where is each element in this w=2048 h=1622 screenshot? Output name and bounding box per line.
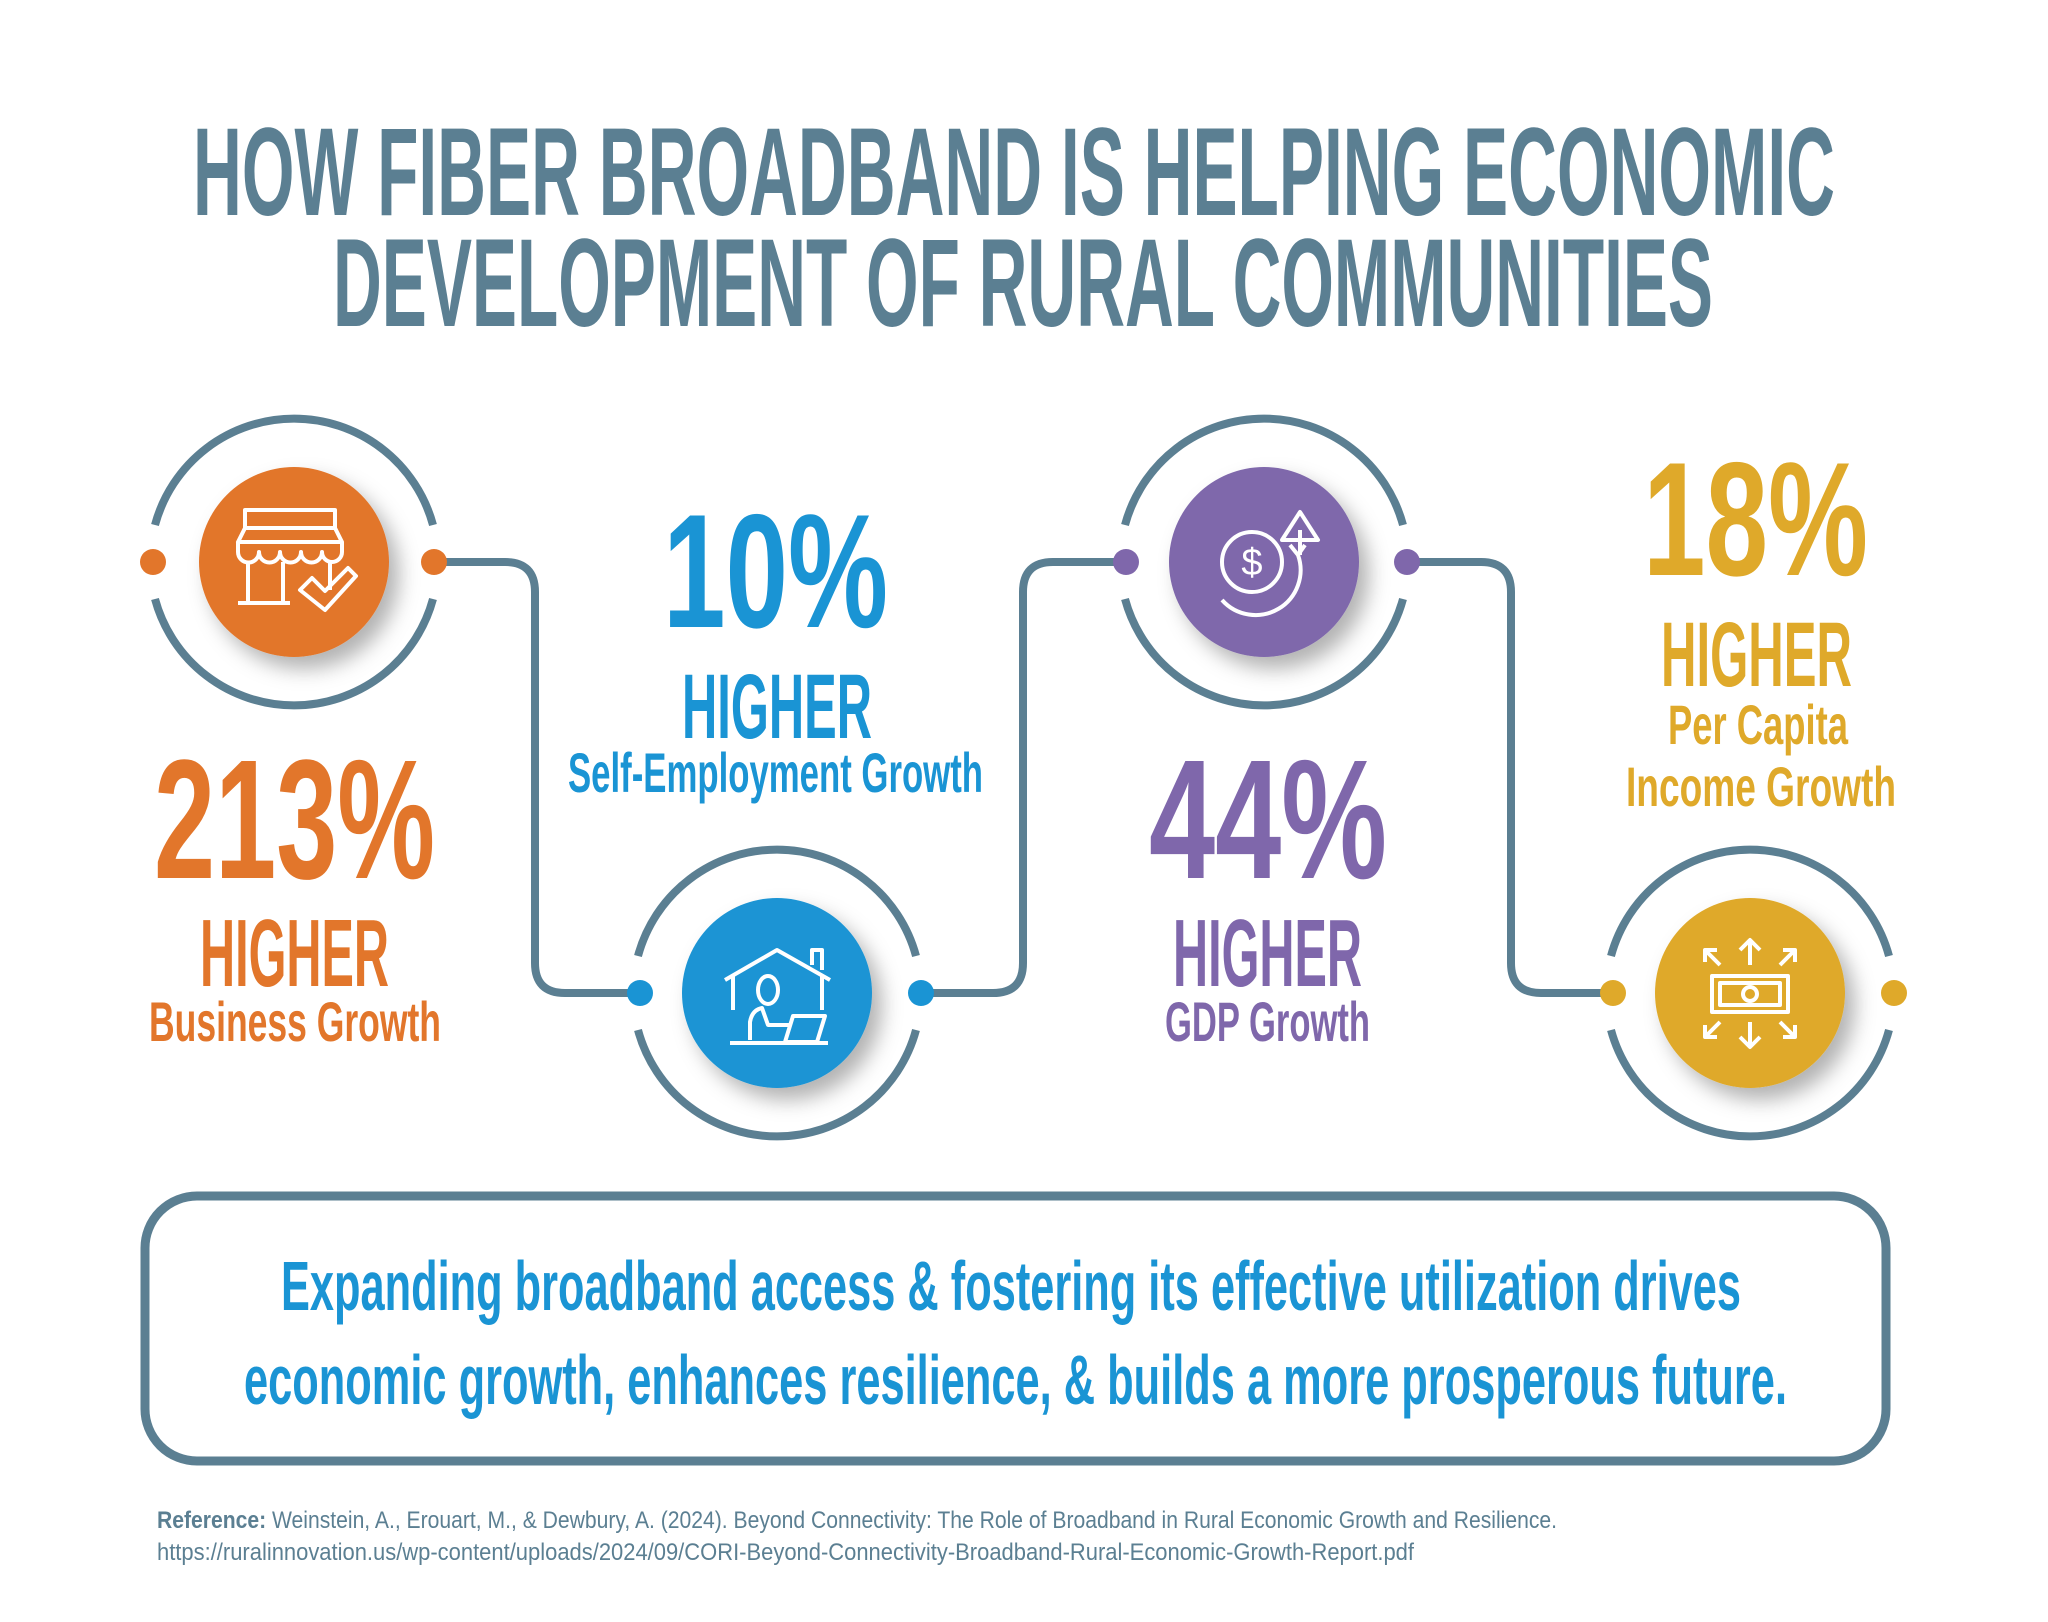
stat: per capita income growth: Income Growth (1626, 755, 1896, 818)
stat: GDP growth: HIGHER (1173, 900, 1362, 1007)
stat: business growth: HIGHER (200, 900, 389, 1007)
stat: business growth: 213% (154, 725, 435, 915)
stat: GDP growth (1149, 725, 1387, 1053)
circle 1: business (140, 419, 447, 705)
stat: self-employment growth: Self-Employment Growth (568, 741, 983, 804)
circle 4: income (1600, 850, 1907, 1136)
summary text (244, 1247, 1787, 1419)
stat: self-employment growth (568, 481, 983, 804)
icon: home office (725, 950, 830, 1043)
icon: money arrows (1705, 940, 1795, 1047)
stat: GDP growth: 44% (1149, 725, 1387, 915)
stat: business growth: Business Growth (149, 990, 441, 1053)
circle 2: self-employment (627, 850, 934, 1136)
reference text: https://ruralinnovation.us/wp-content/uploads/2024/09/CORI-Beyond-Connectivity-Broadband-Rural-Economic-Growth-Report.pdf (157, 1539, 1414, 1566)
icon: dollar growth: $ (1241, 542, 1263, 584)
icon: dollar growth (1222, 512, 1318, 615)
stat: per capita income growth: HIGHER (1661, 604, 1852, 706)
stat: business growth (149, 725, 441, 1053)
stat: GDP growth: GDP Growth (1165, 990, 1370, 1053)
stat: per capita income growth: Per Capita (1668, 693, 1849, 756)
reference text (157, 1507, 1557, 1566)
stat: self-employment growth: HIGHER (682, 656, 872, 758)
connector lines (434, 562, 1613, 993)
stat: per capita income growth (1626, 429, 1896, 818)
reference text: Reference: Weinstein, A., Erouart, M., & Dewbury, A. (2024). Beyond Connectivity: The Role of Broadband in Rural Economic Growth and Resilience. (157, 1507, 1557, 1534)
stat: self-employment growth: 10% (663, 481, 888, 662)
icon: storefront (238, 510, 356, 610)
stat: per capita income growth: 18% (1643, 429, 1868, 610)
circle 3: GDP (1113, 419, 1420, 705)
summary box (145, 1196, 1886, 1461)
title (193, 103, 1835, 353)
